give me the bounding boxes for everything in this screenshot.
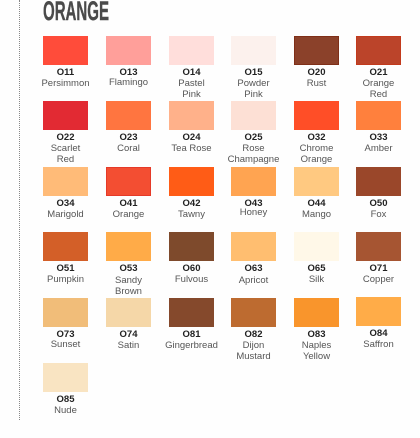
swatch O44 Mango: Mango — [302, 209, 331, 220]
swatch O22 Scarlet Red: Scarlet — [51, 143, 80, 154]
swatch O11 Persimmon — [41, 36, 90, 89]
swatch O51 Pumpkin: Pumpkin — [47, 274, 84, 285]
swatch O41 Orange — [106, 167, 151, 220]
swatch O83 Naples Yellow: O83 — [308, 329, 325, 340]
swatch O60 Fulvous: O60 — [183, 263, 200, 274]
swatch O74 Satin — [106, 298, 151, 351]
swatch O14 Pastel Pink: Pink — [182, 89, 201, 100]
swatch O43 Honey — [231, 167, 276, 218]
swatch O25 Rose Champagne: O25 — [245, 132, 262, 143]
swatch O71 Copper: Copper — [363, 274, 394, 285]
swatch O73 Sunset — [43, 298, 88, 350]
swatch O42 Tawny: O42 — [183, 198, 200, 209]
swatch O23 Coral: Coral — [117, 143, 140, 154]
swatch O20 Rust: O20 — [308, 67, 325, 78]
swatch O81 Gingerbread: O81 — [183, 329, 200, 340]
swatch O63 Apricot: O63 — [245, 263, 262, 274]
dotted margin line — [19, 0, 20, 420]
swatch O84 Saffron: O84 — [370, 328, 387, 339]
swatch O15 Powder Pink: Powder — [237, 78, 270, 89]
swatch O13 Flamingo: O13 — [120, 67, 137, 78]
swatch O82 Dijon Mustard: O82 — [245, 329, 262, 340]
swatch O33 Amber — [356, 101, 401, 154]
swatch O81 Gingerbread: Gingerbread — [165, 340, 218, 351]
swatch O15 Powder Pink — [231, 36, 276, 100]
swatch O20 Rust — [294, 36, 339, 89]
swatch O50 Fox: O50 — [370, 198, 387, 209]
swatch O42 Tawny: Tawny — [178, 209, 205, 220]
swatch O73 Sunset: Sunset — [51, 339, 80, 350]
swatch O41 Orange: Orange — [113, 209, 144, 220]
swatch O85 Nude: Nude — [54, 405, 77, 416]
swatch O85 Nude — [43, 363, 88, 416]
swatch O21 Orange Red: O21 — [370, 67, 387, 78]
swatch O32 Chrome Orange — [294, 101, 339, 165]
swatch O34 Marigold: Marigold — [47, 209, 84, 220]
swatch O44 Mango — [294, 167, 339, 220]
swatch O82 Dijon Mustard — [231, 298, 276, 362]
swatch O74 Satin: O74 — [120, 329, 137, 340]
swatch O53 Sandy Brown — [106, 232, 151, 297]
swatch O32 Chrome Orange: Orange — [301, 154, 332, 165]
swatch O51 Pumpkin: O51 — [57, 263, 74, 274]
swatch O43 Honey: O43 — [245, 198, 262, 209]
swatch O22 Scarlet Red: Red — [57, 154, 74, 165]
swatch O33 Amber: O33 — [370, 132, 387, 143]
swatch O50 Fox — [356, 167, 401, 220]
swatch O32 Chrome Orange: O32 — [308, 132, 325, 143]
swatch O71 Copper — [356, 232, 401, 285]
swatch O11 Persimmon: O11 — [57, 67, 74, 78]
swatch O41 Orange: O41 — [120, 198, 137, 209]
swatch O13 Flamingo: Flamingo — [109, 77, 148, 88]
swatch O25 Rose Champagne: Champagne — [228, 154, 279, 165]
swatch O11 Persimmon: Persimmon — [41, 78, 90, 89]
swatch O25 Rose Champagne — [228, 101, 279, 165]
swatch O34 Marigold: O34 — [57, 198, 74, 209]
swatch O65 Silk: Silk — [309, 274, 324, 285]
swatch O21 Orange Red — [356, 36, 401, 100]
swatch O15 Powder Pink: O15 — [245, 67, 262, 78]
swatch O73 Sunset: O73 — [57, 329, 74, 340]
swatch O15 Powder Pink: Pink — [244, 89, 263, 100]
swatch O33 Amber: Amber — [364, 143, 392, 154]
swatch O83 Naples Yellow — [294, 298, 339, 362]
swatch O63 Apricot — [231, 232, 276, 286]
swatch O25 Rose Champagne: Rose — [242, 143, 265, 154]
swatch O44 Mango: O44 — [308, 198, 325, 209]
swatch O24 Tea Rose: Tea Rose — [171, 143, 212, 154]
swatch O20 Rust: Rust — [307, 78, 326, 89]
swatch O81 Gingerbread — [165, 298, 218, 351]
swatch O65 Silk: O65 — [308, 263, 325, 274]
swatch O50 Fox: Fox — [371, 209, 386, 220]
swatch O42 Tawny — [169, 167, 214, 220]
swatch O60 Fulvous: Fulvous — [175, 274, 208, 285]
swatch O34 Marigold — [43, 167, 88, 220]
swatch O14 Pastel Pink — [169, 36, 214, 100]
swatch O22 Scarlet Red: O22 — [57, 132, 74, 143]
swatch O71 Copper: O71 — [370, 263, 387, 274]
swatch O24 Tea Rose — [169, 101, 214, 154]
swatch O22 Scarlet Red — [43, 101, 88, 165]
swatch O53 Sandy Brown: O53 — [120, 263, 137, 274]
swatch O14 Pastel Pink: O14 — [183, 67, 200, 78]
swatch O65 Silk — [294, 232, 339, 285]
swatch O84 Saffron — [356, 297, 401, 350]
swatch O13 Flamingo — [106, 36, 151, 88]
swatch O23 Coral — [106, 101, 151, 154]
swatch O60 Fulvous — [169, 232, 214, 285]
swatch O84 Saffron: Saffron — [363, 339, 394, 350]
swatch O23 Coral: O23 — [120, 132, 137, 143]
swatch O53 Sandy Brown: Brown — [115, 286, 142, 297]
swatch O32 Chrome Orange: Chrome — [300, 143, 333, 154]
swatch O14 Pastel Pink: Pastel — [178, 78, 205, 89]
swatch O82 Dijon Mustard: Dijon — [243, 340, 264, 351]
swatch O21 Orange Red: Red — [370, 89, 387, 100]
swatch O53 Sandy Brown: Sandy — [115, 275, 142, 286]
swatch O51 Pumpkin — [43, 232, 88, 285]
swatch O83 Naples Yellow: Naples — [302, 340, 331, 351]
swatch O82 Dijon Mustard: Mustard — [236, 351, 271, 362]
swatch O24 Tea Rose: O24 — [183, 132, 200, 143]
swatch O43 Honey: Honey — [240, 207, 267, 218]
swatch O63 Apricot: Apricot — [239, 275, 268, 286]
swatch O21 Orange Red: Orange — [363, 78, 394, 89]
swatch O83 Naples Yellow: Yellow — [303, 351, 330, 362]
swatch O74 Satin: Satin — [118, 340, 139, 351]
swatch O85 Nude: O85 — [57, 394, 74, 405]
